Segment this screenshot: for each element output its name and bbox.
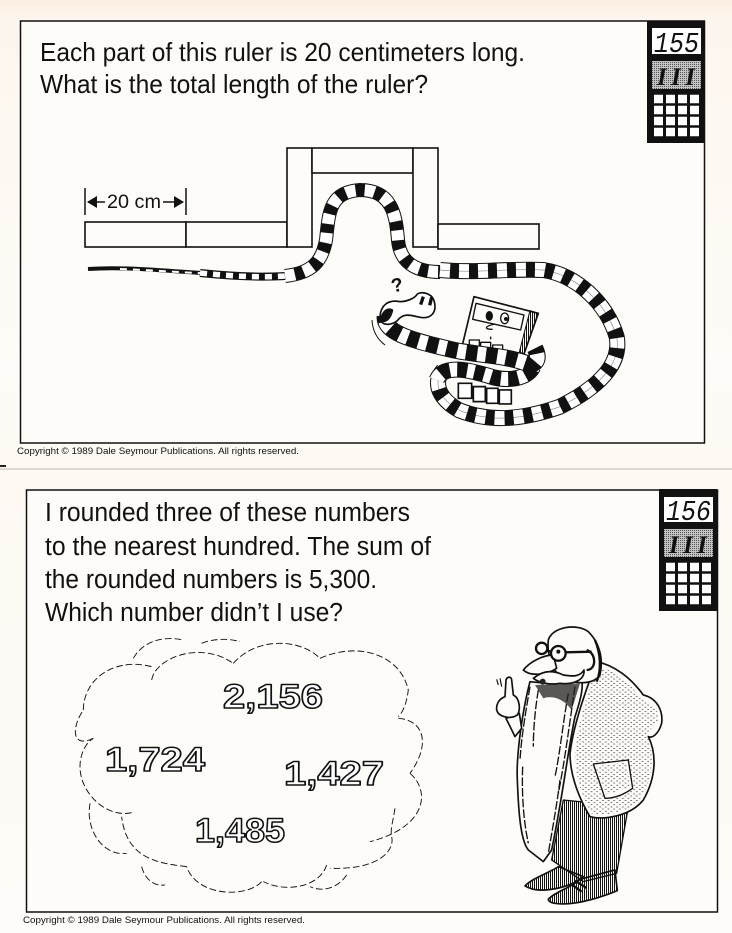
calculator badge 155 (647, 21, 705, 143)
thought cloud (75, 639, 422, 892)
snake tail and arch (88, 190, 440, 277)
question text 156: Which number didn’t I use? (45, 599, 343, 627)
trousers (552, 800, 628, 882)
number 1,427: 1,427 (284, 755, 384, 793)
panel: card 155 ruler problem (17, 21, 705, 456)
coil bands (385, 317, 537, 404)
question text 156: I rounded three of these numbers (45, 499, 410, 527)
head and face (548, 627, 601, 683)
copyright 155: Copyright © 1989 Dale Seymour Publications. All rights reserved. (17, 446, 299, 456)
measure label 20 cm (85, 188, 186, 215)
calculator badge 155: III (656, 64, 696, 91)
calculator badge 156 (659, 489, 717, 611)
question text 155: Each part of this ruler is 20 centimeters long. (40, 37, 525, 67)
bearded man illustration (497, 627, 662, 904)
calculator badge 156: 156 (666, 496, 711, 529)
calculator badge 156: III (668, 532, 708, 559)
question text 155: What is the total length of the ruler? (40, 69, 428, 99)
beard (517, 678, 582, 862)
copyright 156: Copyright © 1989 Dale Seymour Publications. All rights reserved. (23, 915, 305, 925)
raised hand (497, 677, 522, 737)
glasses (536, 643, 592, 661)
number 1,485: 1,485 (195, 812, 285, 850)
number 1,724: 1,724 (105, 741, 205, 779)
question text 156: the rounded numbers is 5,300. (45, 566, 377, 594)
jacket (570, 662, 662, 818)
question text 156: to the nearest hundred. The sum of (45, 533, 432, 561)
measure label 20 cm: 20 cm (107, 192, 161, 213)
pocket (593, 760, 633, 798)
question text 155 (40, 37, 525, 99)
calculator badge 155: 155 (654, 28, 699, 61)
panel: card 156 rounding problem (23, 489, 718, 925)
question text 156 (45, 499, 432, 627)
snake head (380, 293, 435, 324)
snake right loop and coils (372, 270, 617, 418)
question mark: ? (389, 275, 405, 298)
ruler (85, 148, 539, 249)
number 2,156: 2,156 (223, 678, 323, 716)
number list in cloud (105, 678, 384, 850)
shoes (525, 867, 617, 904)
calculator character (463, 297, 538, 354)
